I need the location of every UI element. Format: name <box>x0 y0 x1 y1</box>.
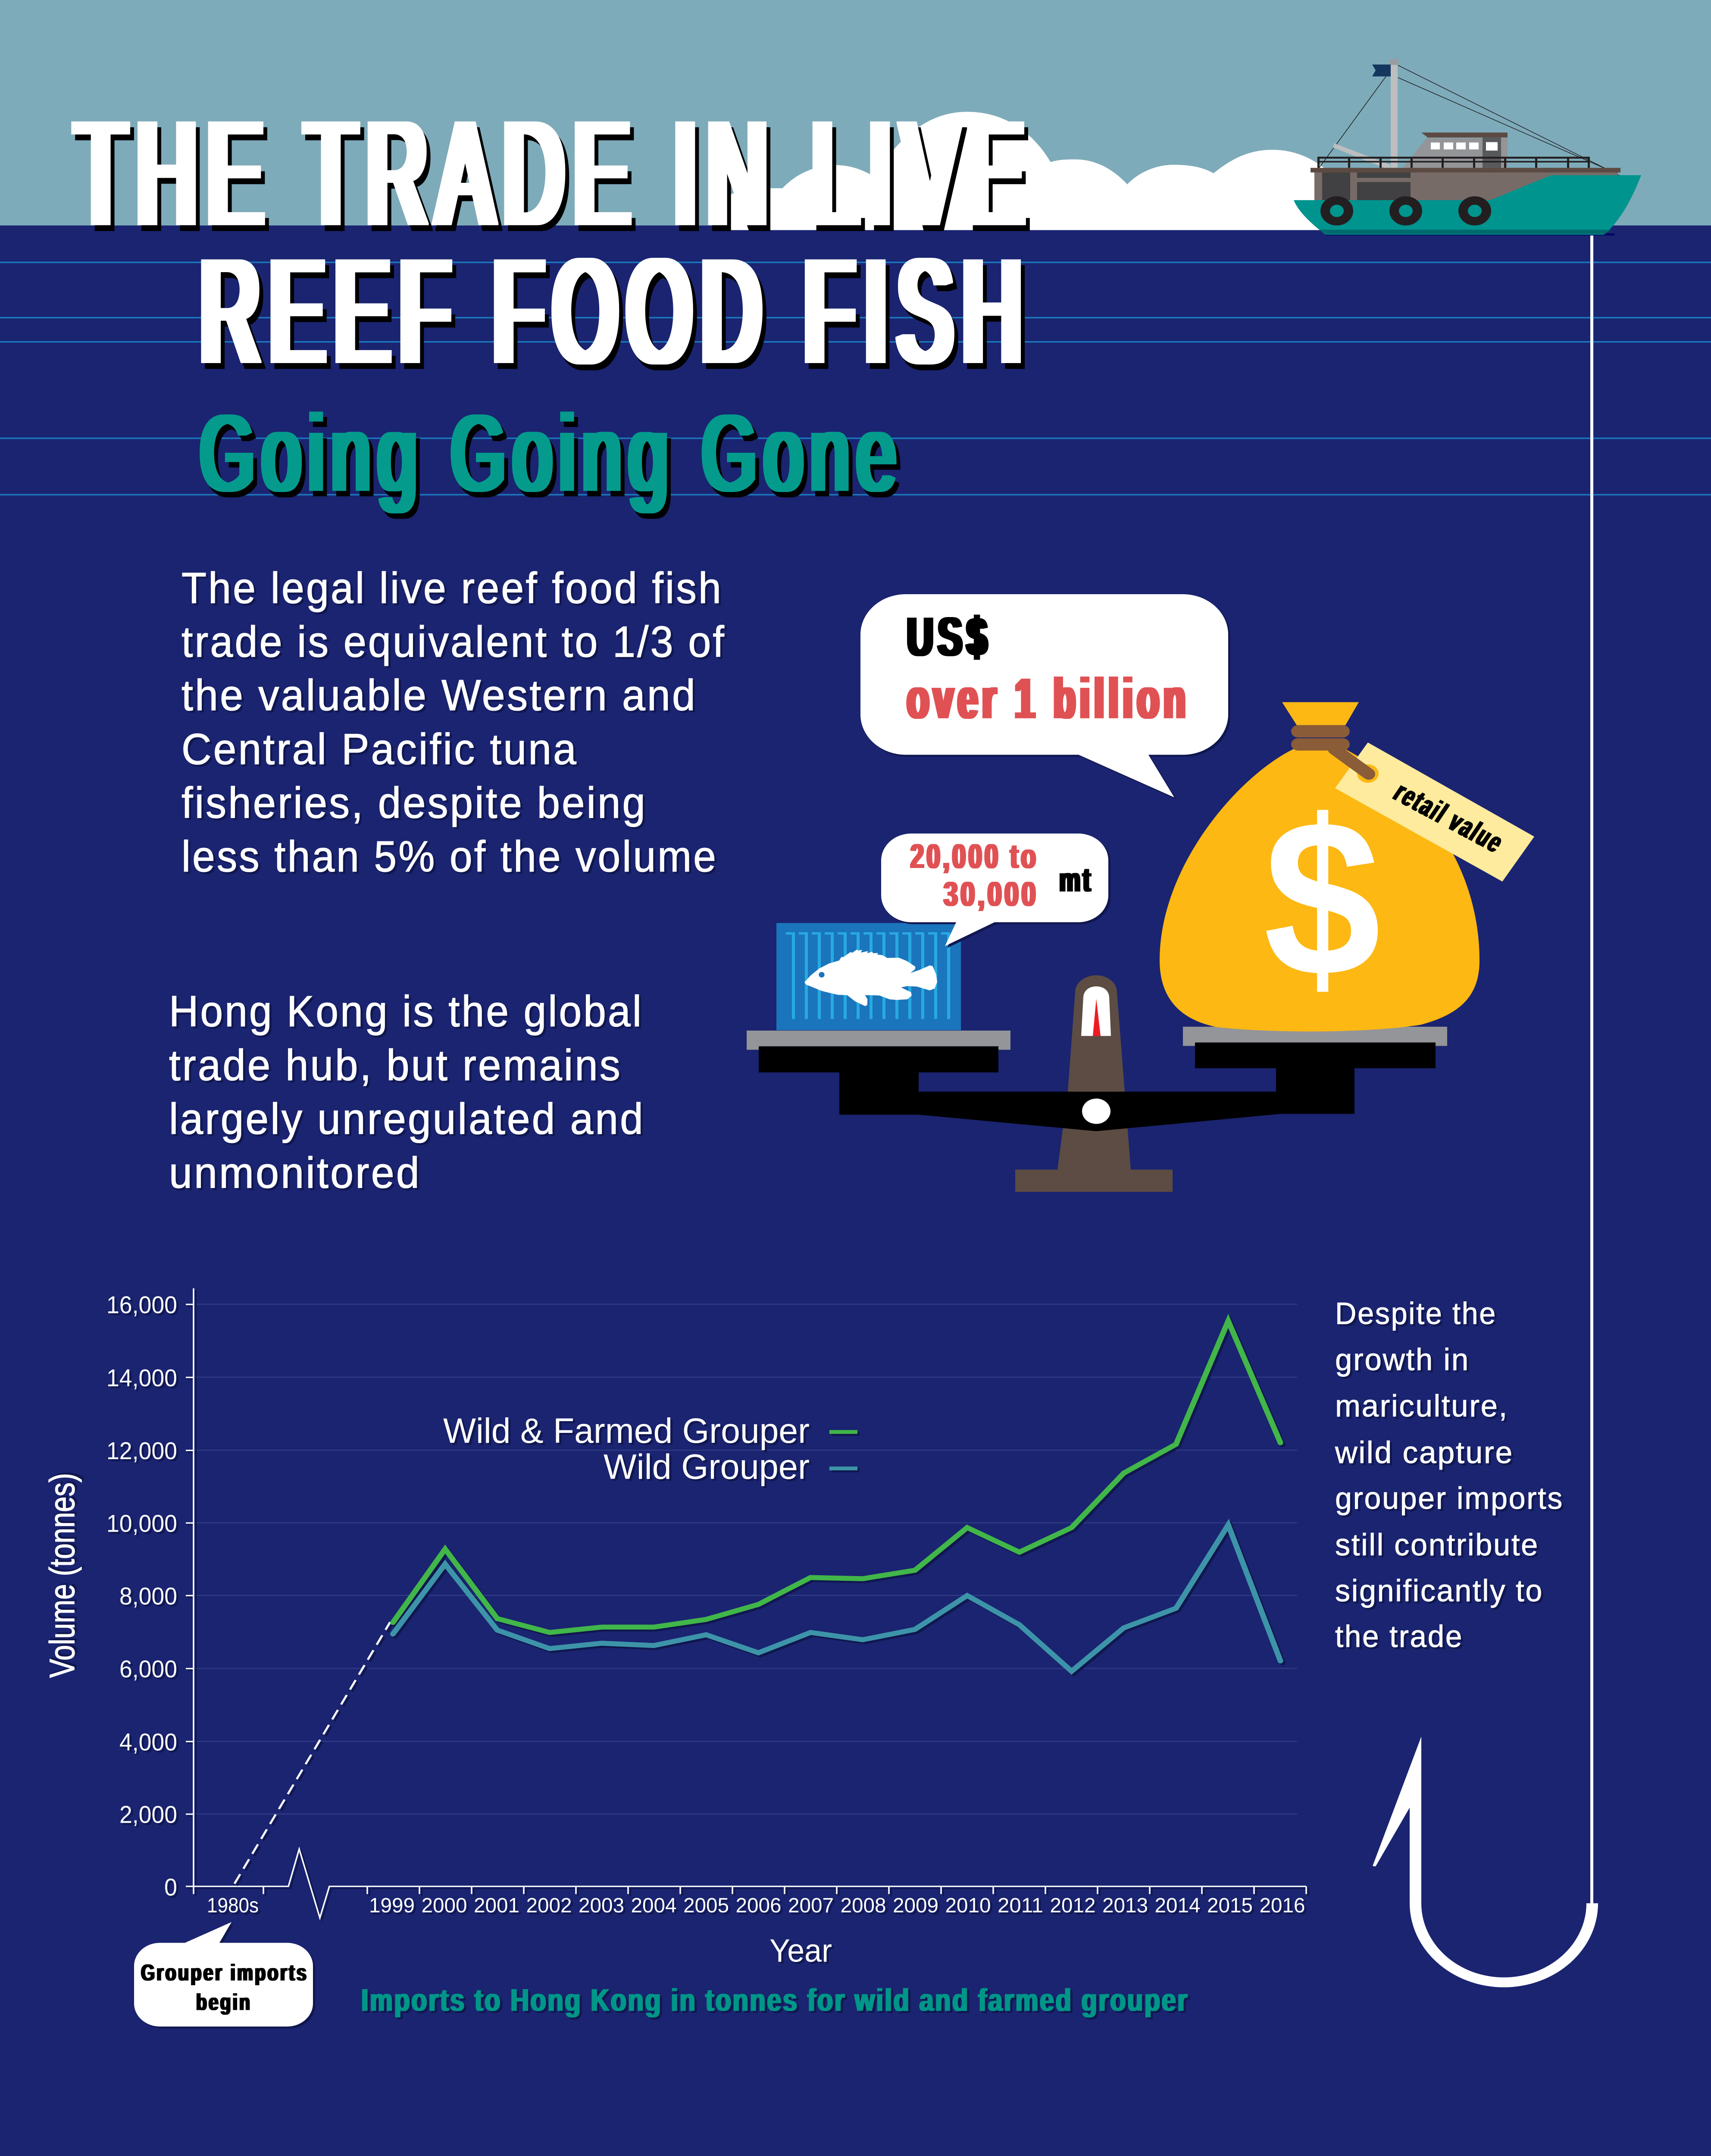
text block: Hong Kong hub: Hong Kong is the global <box>169 987 643 1036</box>
x axis labels: 2015 <box>1207 1894 1253 1917</box>
y axis labels <box>106 1291 177 1901</box>
icon: money bag <box>1160 702 1534 1031</box>
boat hull <box>1294 175 1641 235</box>
right pan <box>1183 1027 1447 1046</box>
x axis labels: 2001 <box>474 1894 519 1917</box>
y axis labels: 12,000 <box>106 1437 177 1464</box>
callout: volume: 30,000 <box>944 875 1038 913</box>
callout: grouper imports begin <box>134 1922 313 2027</box>
x axis labels <box>207 1894 1305 1917</box>
callout: volume: 20,000 to <box>910 837 1038 876</box>
x axis labels: 2016 <box>1260 1894 1305 1917</box>
bag neck <box>1282 702 1359 725</box>
x axis labels: 2011 <box>998 1894 1043 1917</box>
y axis labels: 10,000 <box>106 1510 177 1537</box>
x axis labels: 2002 <box>526 1894 572 1917</box>
text block: wild capture note: significantly to <box>1335 1574 1543 1608</box>
chart legend <box>443 1411 857 1486</box>
line chart <box>43 1288 1306 1968</box>
text block: trade value: fisheries, despite being <box>181 778 647 827</box>
boat flag <box>1372 65 1391 76</box>
x axis title: Year <box>769 1933 832 1968</box>
title <box>75 91 1034 394</box>
text block: wild capture note: Despite the <box>1335 1297 1497 1331</box>
chart axes <box>186 1288 1306 1918</box>
icon: shipping container with fish <box>776 923 961 1030</box>
x axis labels: 2010 <box>945 1894 991 1917</box>
text block: trade value: The legal live reef food fish <box>181 563 723 612</box>
scale gauge <box>1081 987 1111 1036</box>
x axis labels: 1980s <box>207 1894 259 1917</box>
tag label: retail value <box>1388 776 1511 859</box>
text block: Hong Kong hub: trade hub, but remains <box>169 1040 622 1090</box>
callout: grouper imports begin: begin <box>196 1990 252 2015</box>
text block: trade value: the valuable Western and <box>181 671 697 720</box>
text block: trade value: trade is equivalent to 1/3 of <box>181 617 726 666</box>
callout: value: US$ <box>907 606 992 667</box>
x axis labels: 2004 <box>631 1894 677 1917</box>
text block: wild capture note: grouper imports <box>1335 1481 1564 1516</box>
x axis labels: 2000 <box>422 1894 467 1917</box>
x axis labels: 2008 <box>841 1894 886 1917</box>
icon: fishing boat <box>1294 59 1641 235</box>
boat mast <box>1389 59 1398 168</box>
x axis labels: 2003 <box>579 1894 624 1917</box>
bag body <box>1160 747 1480 1031</box>
y axis labels: 0 <box>164 1873 177 1901</box>
y axis labels: 16,000 <box>106 1291 177 1319</box>
x axis labels: 2009 <box>893 1894 938 1917</box>
icon: grouper fish <box>804 950 937 1006</box>
fishing line <box>1590 235 1593 1904</box>
text block: wild capture note: still contribute <box>1335 1528 1539 1562</box>
text block: wild capture note <box>1335 1297 1564 1654</box>
scale stand <box>1015 975 1173 1192</box>
bag dollar sign: $ <box>1264 774 1381 1023</box>
text block: Hong Kong hub <box>169 987 645 1197</box>
boat railing <box>1317 157 1590 168</box>
y axis title: Volume (tonnes) <box>43 1473 82 1678</box>
subtitle: Going Going Gone <box>200 392 903 514</box>
callout: value: over 1 billion <box>907 666 1190 731</box>
dashed estimate line <box>235 1622 390 1883</box>
bag ties <box>1291 725 1369 774</box>
x axis labels: 2012 <box>1050 1894 1096 1917</box>
series: wild and farmed grouper <box>393 1321 1280 1633</box>
chart legend: Wild Grouper <box>604 1447 810 1486</box>
text block: wild capture note: the trade <box>1335 1620 1463 1654</box>
x axis labels: 2005 <box>683 1894 729 1917</box>
icon: fish hook <box>1373 1736 1598 1987</box>
sky <box>0 0 1711 226</box>
clouds <box>724 112 1324 230</box>
callout: value <box>860 594 1228 797</box>
text block: wild capture note: growth in <box>1335 1342 1470 1377</box>
callout: volume <box>881 834 1108 946</box>
x axis labels: 2013 <box>1102 1894 1148 1917</box>
y axis labels: 8,000 <box>119 1582 177 1610</box>
left pan <box>747 1031 1010 1050</box>
text block: trade value: less than 5% of the volume <box>181 832 718 881</box>
boat cabin <box>1403 132 1508 168</box>
callout: volume: mt <box>1059 861 1093 899</box>
series: wild grouper <box>393 1525 1280 1671</box>
x axis labels: 2007 <box>788 1894 834 1917</box>
illustration: balance scale <box>747 975 1447 1192</box>
y axis labels: 14,000 <box>106 1364 177 1391</box>
callout: grouper imports begin: Grouper imports <box>141 1960 308 1986</box>
boat tyres <box>1325 201 1486 221</box>
text block: wild capture note: wild capture <box>1335 1435 1514 1470</box>
chart legend: Wild & Farmed Grouper <box>443 1411 810 1451</box>
scale beam <box>839 1068 1354 1131</box>
text block: trade value: Central Pacific tuna <box>181 724 578 773</box>
y axis labels: 6,000 <box>119 1655 177 1683</box>
text block: wild capture note: mariculture, <box>1335 1389 1508 1423</box>
text block: Hong Kong hub: largely unregulated and <box>169 1094 645 1143</box>
scale pivot <box>1082 1099 1110 1124</box>
price tag <box>1335 743 1534 881</box>
text block: trade value <box>181 563 726 881</box>
x axis labels: 1999 <box>369 1894 415 1917</box>
y axis labels: 2,000 <box>119 1801 177 1828</box>
y axis labels: 4,000 <box>119 1728 177 1756</box>
x axis labels: 2014 <box>1155 1894 1201 1917</box>
x axis labels: 2006 <box>735 1894 782 1917</box>
text block: Hong Kong hub: unmonitored <box>169 1148 421 1197</box>
chart caption: Imports to Hong Kong in tonnes for wild and farmed grouper <box>361 1983 1189 2018</box>
